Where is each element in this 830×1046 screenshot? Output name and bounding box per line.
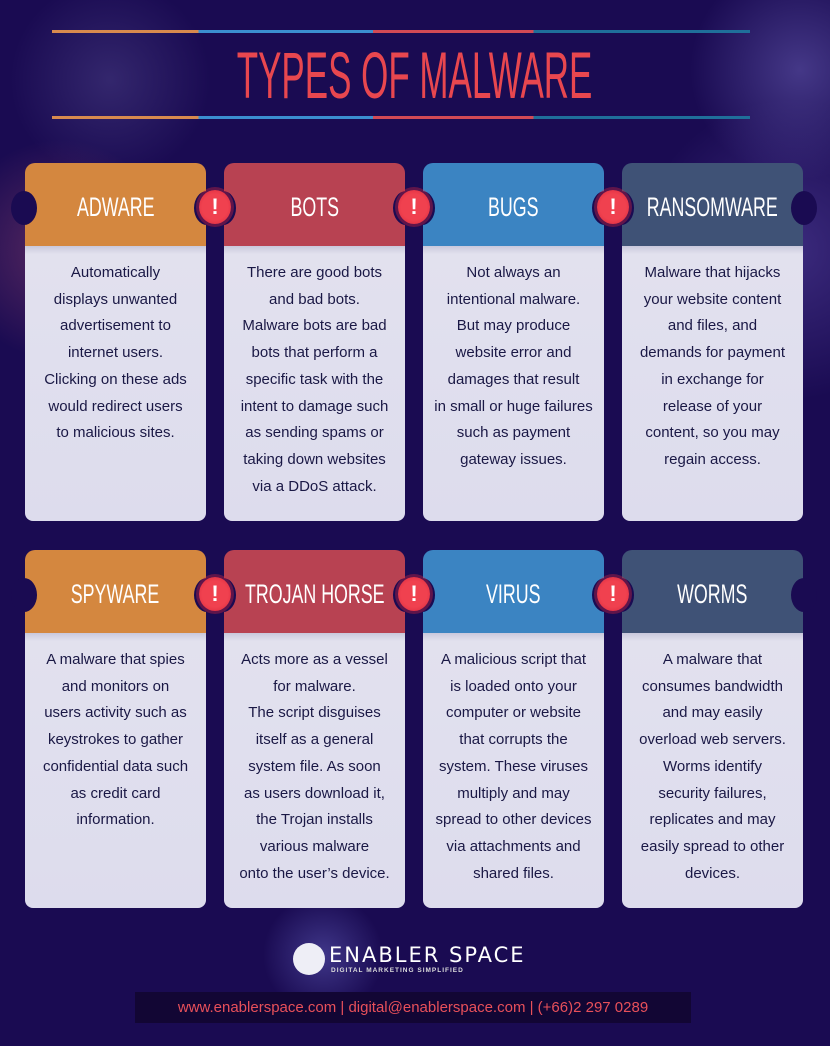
icon: alert 4: ! (211, 581, 219, 606)
card: adware: Clicking on these ads (44, 371, 187, 388)
card: virus: system. These viruses (439, 758, 588, 775)
card: worms: easily spread to other (641, 838, 784, 855)
card: worms: Worms identify (663, 758, 762, 775)
card: spyware (25, 550, 206, 908)
card: worms: replicates and may (650, 811, 775, 828)
card: worms: overload web servers. (639, 731, 786, 748)
card: spyware: information. (76, 811, 155, 828)
card: trojan horse: various malware (260, 838, 369, 855)
icon: alert 4 (199, 577, 231, 611)
card: trojan horse: onto the user’s device. (239, 865, 390, 882)
card: worms: A malware that (663, 651, 762, 668)
card: bugs: Not always an (466, 264, 561, 281)
card: spyware: confidential data such (43, 758, 188, 775)
card: worms: and may easily (662, 704, 763, 721)
card: bots: and bad bots. (269, 291, 360, 308)
card: spyware: SPYWARE (71, 579, 160, 609)
card: worms: consumes bandwidth (642, 678, 783, 695)
card: ransomware: RANSOMWARE (647, 192, 778, 222)
card: bugs: intentional malware. (447, 291, 580, 308)
card: virus (423, 550, 604, 908)
icon: alert 1 (199, 190, 231, 224)
card: bots (224, 163, 405, 521)
card: virus: A malicious script that (441, 651, 586, 668)
icon: alert 3: ! (609, 194, 617, 219)
icon: alert 3 (597, 190, 629, 224)
icon: alert 6: ! (609, 581, 617, 606)
card: ransomware: release of your (663, 398, 762, 415)
card: ransomware: in exchange for (661, 371, 764, 388)
logo: ENABLER SPACE (329, 943, 526, 967)
card: spyware: A malware that spies (46, 651, 185, 668)
card: bots: intent to damage such (241, 398, 388, 415)
icon: alert 5: ! (410, 581, 418, 606)
card: virus: multiply and may (457, 785, 570, 802)
icon: alert 2: ! (410, 194, 418, 219)
card: trojan horse: itself as a general (256, 731, 373, 748)
card: bugs: gateway issues. (460, 451, 567, 468)
card: trojan horse: the Trojan installs (256, 811, 373, 828)
card: adware (11, 163, 206, 521)
card: bots: specific task with the (246, 371, 383, 388)
card: worms (622, 550, 803, 908)
card: bugs: BUGS (488, 192, 539, 222)
card: trojan horse: system file. As soon (248, 758, 381, 775)
card: spyware: keystrokes to gather (48, 731, 183, 748)
card: virus: VIRUS (486, 579, 541, 609)
card: bugs: in small or huge failures (434, 398, 593, 415)
card: adware: ADWARE (77, 192, 154, 222)
logo (293, 943, 526, 975)
card: ransomware: and files, and (668, 317, 757, 334)
card: worms: devices. (685, 865, 740, 882)
icon: alert 6 (597, 577, 629, 611)
logo: DIGITAL MARKETING SIMPLIFIED (331, 967, 464, 974)
card: trojan horse: TROJAN HORSE (245, 579, 384, 609)
card: bugs (423, 163, 604, 521)
card: worms: security failures, (658, 785, 767, 802)
footer contact: www.enablerspace.com | digital@enablerspace.com | (+66)2 297 0289 (178, 999, 648, 1016)
card: ransomware: Malware that hijacks (645, 264, 780, 281)
icon: alert 1: ! (211, 194, 219, 219)
card: adware: advertisement to (60, 317, 171, 334)
card: adware: would redirect users (48, 398, 183, 415)
card: bots: via a DDoS attack. (252, 478, 377, 495)
card: trojan horse: Acts more as a vessel (241, 651, 388, 668)
card: bots: BOTS (290, 192, 339, 222)
card: trojan horse: for malware. (273, 678, 356, 695)
icon: alert 5 (398, 577, 430, 611)
card: ransomware (622, 163, 817, 521)
card: bots: Malware bots are bad (242, 317, 387, 334)
card: trojan horse: The script disguises (248, 704, 381, 721)
card: adware: Automatically (71, 264, 160, 281)
card: bots: as sending spams or (245, 424, 384, 441)
card: virus: spread to other devices (436, 811, 591, 828)
card: worms: WORMS (677, 579, 748, 609)
card: bugs: damages that result (448, 371, 579, 388)
footer contact (135, 992, 691, 1023)
card: virus: that corrupts the (459, 731, 568, 748)
card: adware: internet users. (68, 344, 163, 361)
card: ransomware: your website content (644, 291, 781, 308)
card: virus: is loaded onto your (450, 678, 577, 695)
card: virus: shared files. (473, 865, 554, 882)
card: bots: taking down websites (243, 451, 386, 468)
card: ransomware: content, so you may (645, 424, 780, 441)
card: adware: to malicious sites. (56, 424, 175, 441)
card: virus: computer or website (446, 704, 581, 721)
card: virus: via attachments and (446, 838, 581, 855)
card: trojan horse (224, 550, 405, 908)
card: bugs: But may produce (457, 317, 570, 334)
card: spyware: and monitors on (62, 678, 169, 695)
card: bots: There are good bots (247, 264, 382, 281)
title: TYPES OF MALWARE (237, 38, 593, 112)
card: bugs: website error and (456, 344, 571, 361)
icon: alert 2 (398, 190, 430, 224)
card: spyware: as credit card (70, 785, 161, 802)
card: spyware: users activity such as (44, 704, 187, 721)
card: bots: bots that perform a (252, 344, 377, 361)
card: trojan horse: as users download it, (244, 785, 385, 802)
card: ransomware: demands for payment (640, 344, 785, 361)
card: bugs: such as payment (457, 424, 570, 441)
card: ransomware: regain access. (664, 451, 761, 468)
card: adware: displays unwanted (54, 291, 177, 308)
